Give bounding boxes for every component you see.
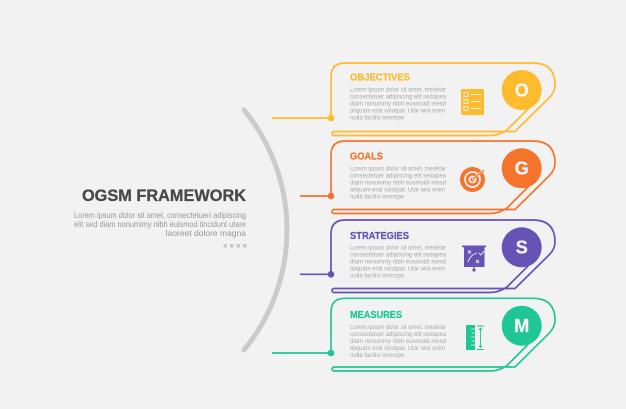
body text: Lorem ipsum dolor sit amet, medelar — [350, 245, 447, 252]
title: OGSM FRAMEWORK — [82, 187, 246, 205]
body text — [350, 245, 447, 280]
badge: G: G — [515, 159, 529, 179]
badge: O: O — [515, 80, 529, 100]
outline — [331, 63, 555, 136]
heading: MEASURES — [350, 309, 402, 321]
body text: Lorem ipsum dolor sit amet, medelar — [350, 324, 447, 331]
heading: STRATEGIES — [350, 230, 409, 242]
description — [74, 210, 246, 238]
connector — [300, 193, 334, 199]
body text: aliquam erat volutpat. Utar wisi enim — [350, 345, 445, 352]
body text: consectetuer adipiscing elit sedapea — [350, 252, 446, 259]
icon: checklist — [461, 89, 484, 115]
body text — [350, 86, 447, 122]
icon: presentation board — [462, 246, 486, 272]
body text: nulla facilisi lorempe — [350, 352, 404, 359]
outline — [331, 141, 555, 214]
body text: nulla facilisi lorempe — [350, 273, 404, 280]
description: laoreet dolore magna — [166, 228, 246, 238]
badge: S — [502, 227, 542, 267]
connector — [272, 350, 334, 356]
central arc — [244, 110, 287, 350]
body text: Lorem ipsum dolor sit amet, medelar — [350, 86, 447, 94]
badge: G — [502, 148, 542, 188]
body text: nulla facilisi lorempe — [350, 114, 404, 122]
body text: consectetuer adipiscing elit sedapea — [350, 172, 446, 180]
icon: target — [460, 167, 485, 192]
panel: measures — [272, 298, 555, 371]
body text: diam nonummy nibh eusmoidi mesd — [350, 180, 446, 186]
panel: goals — [300, 141, 555, 214]
body text: Lorem ipsum dolor sit amet, medelar — [350, 166, 447, 172]
body text — [350, 324, 447, 359]
body text: consectetuer adipiscing elit sedapea — [350, 331, 446, 338]
title block — [74, 187, 246, 248]
body text: aliquam erat volutpat. Utar wisi enim — [350, 186, 445, 194]
outline — [331, 220, 555, 292]
badge: S: S — [516, 238, 528, 258]
icon: ruler — [466, 325, 484, 350]
heading: OBJECTIVES — [350, 72, 410, 84]
badge: M: M — [514, 316, 529, 336]
body text: diam nonummy nibh eusmoidi mesd — [350, 338, 446, 345]
body text — [350, 166, 447, 200]
connector — [300, 271, 334, 278]
body text: nulla facilisi lorempe — [350, 194, 404, 200]
badge: O — [502, 70, 542, 110]
body text: consectetuer adipiscing elit sedapea — [350, 94, 446, 100]
description: elit sed diam nonumimy nibh euismod tincidunt utare — [74, 219, 246, 229]
body text: aliquam erat volutpat. Utar wisi enim — [350, 108, 445, 114]
body text: aliquam erat volutpat. Utar wisi enim — [350, 266, 445, 273]
outline — [331, 298, 555, 371]
connector — [272, 115, 334, 121]
badge: M — [502, 306, 542, 346]
panel: objectives — [272, 63, 555, 136]
heading: GOALS — [350, 151, 383, 163]
body text: diam nonummy nibh eusmoidi mesd — [350, 259, 446, 266]
body text: diam nonummy nibh eusmoidi mesd — [350, 100, 446, 108]
panel: strategies — [300, 220, 555, 292]
pagination dots — [224, 244, 246, 248]
description: Lorem ipsum dolor sit amet, consectetueri adipiscing — [74, 210, 246, 220]
